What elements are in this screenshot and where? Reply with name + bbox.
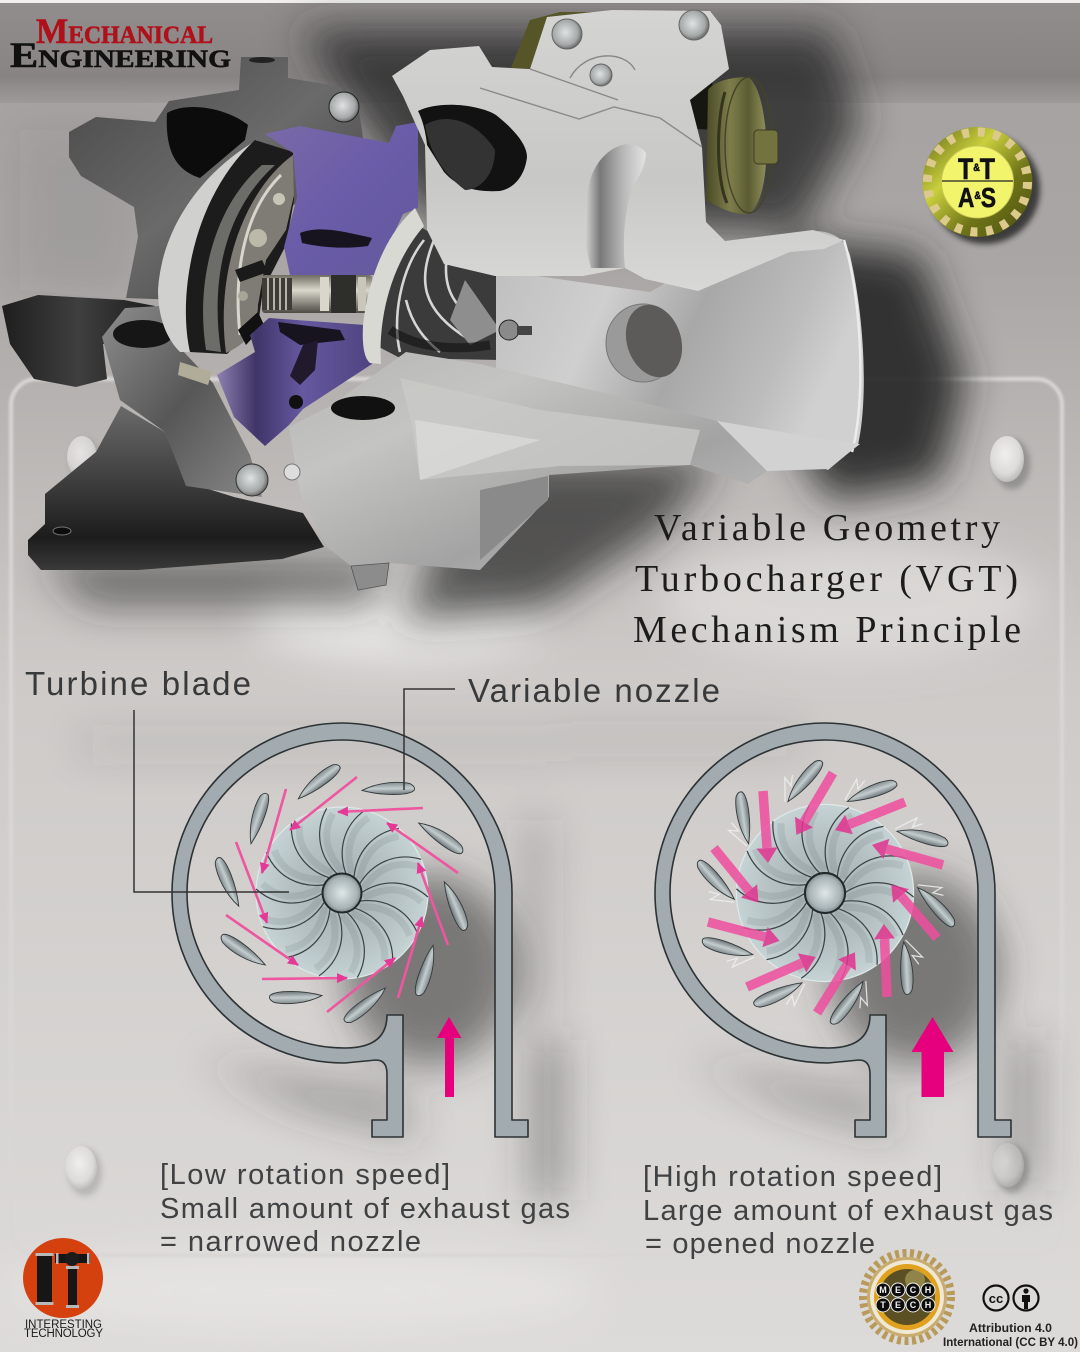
panel screw: top right [990, 436, 1030, 489]
caption: low rotation speed: Small amount of exhaust gas [160, 1193, 570, 1225]
licence text: International (CC BY 4.0) [943, 1337, 1078, 1349]
caption: high rotation speed: [High rotation speed] [643, 1161, 942, 1193]
turbine wheel [736, 804, 914, 982]
title: Variable Geometry [654, 507, 1000, 549]
panel screw: top left [67, 436, 101, 484]
logo: Interesting Technology: TECHNOLOGY [24, 1328, 103, 1340]
badge: T&T A&S gear: & [973, 162, 980, 174]
title: Turbocharger (VGT) [635, 558, 1018, 600]
shaft [262, 275, 372, 313]
logo: Mechanical Engineering: Mechanical [36, 11, 213, 51]
lower silver volute arm [289, 352, 860, 590]
caption: high rotation speed: = opened nozzle [645, 1228, 875, 1260]
diagram: high rotation speed [655, 723, 1011, 1137]
icon: Creative Commons CC BY: cc [989, 1291, 1003, 1306]
panel screw: bottom right [992, 1143, 1029, 1193]
middle casting [102, 306, 262, 497]
thick exhaust flow arrows [708, 773, 943, 1013]
badge: Mech Tech: E [895, 1285, 901, 1295]
title: Mechanism Principle [633, 609, 1021, 651]
lower purple centre housing [217, 318, 372, 446]
actuator fins [668, 78, 716, 130]
caption: low rotation speed: = narrowed nozzle [160, 1226, 421, 1258]
badge: T&T A&S gear: A [958, 182, 978, 213]
actuator canister [706, 77, 778, 214]
badge: T&T A&S gear: T [958, 153, 976, 186]
compressor shroud ring [363, 208, 424, 364]
caption: high rotation speed [643, 1161, 1053, 1260]
icon: Creative Commons CC BY [984, 1286, 1038, 1310]
badge: Mech Tech: C [910, 1285, 917, 1295]
turbo drop shadows [20, 30, 965, 620]
badge: Mech Tech: H [925, 1285, 931, 1295]
inlet arrow large [912, 1017, 954, 1097]
thin exhaust flow arrows [226, 777, 458, 1012]
licence text [943, 1323, 1078, 1349]
badge: T&T A&S gear [922, 127, 1040, 244]
volute casing [172, 723, 528, 1137]
compressor inlet trumpet [496, 231, 864, 470]
leader line: variable nozzle [404, 689, 455, 790]
left exhaust cup [2, 295, 155, 387]
badge: Mech Tech [863, 1253, 951, 1341]
badge: Mech Tech: E [895, 1300, 901, 1310]
caption: low rotation speed [160, 1159, 570, 1258]
main silver housing with bracket [392, 10, 844, 291]
diagram: low rotation speed [172, 723, 528, 1137]
diagram shadows [80, 730, 1040, 1200]
logo: Interesting Technology [23, 1238, 103, 1340]
bolts and nut [236, 10, 709, 496]
leader line: turbine blade [134, 710, 289, 892]
compressor wheel [375, 225, 505, 360]
badge: Mech Tech: C [910, 1300, 917, 1310]
caption: low rotation speed: [Low rotation speed] [160, 1159, 450, 1191]
nozzle vanes opened [694, 757, 958, 1028]
badge: Mech Tech: T [880, 1300, 886, 1310]
badge: T&T A&S gear: S [981, 182, 996, 213]
logo: Mechanical Engineering [10, 11, 231, 75]
nozzle vanes narrowed [212, 761, 471, 1026]
volute casing [655, 723, 1011, 1137]
badge: Mech Tech: H [925, 1300, 931, 1310]
panel screw: bottom left [65, 1146, 102, 1196]
rear turbine housing [69, 57, 363, 300]
badge: Mech Tech: M [879, 1285, 887, 1295]
upper purple centre housing [265, 122, 418, 275]
heading label: Turbine blade: Turbine blade [25, 665, 251, 702]
caption: high rotation speed: Large amount of exhaust gas [643, 1195, 1053, 1227]
turbine wheel [256, 807, 428, 979]
badge: T&T A&S gear: T [980, 153, 995, 186]
turbocharger cutaway illustration [2, 10, 864, 590]
bearing disc crescent [158, 140, 294, 354]
logo: Interesting Technology: INTERESTING [25, 1319, 102, 1331]
heading label: Variable nozzle: Variable nozzle [468, 672, 720, 709]
inlet arrow small [437, 1017, 462, 1097]
logo: Mechanical Engineering: Engineering [10, 35, 231, 75]
licence text: Attribution 4.0 [969, 1323, 1052, 1335]
base flange [28, 406, 324, 570]
badge: T&T A&S gear: & [974, 190, 981, 202]
title [633, 507, 1021, 651]
top olive backing [511, 12, 612, 70]
